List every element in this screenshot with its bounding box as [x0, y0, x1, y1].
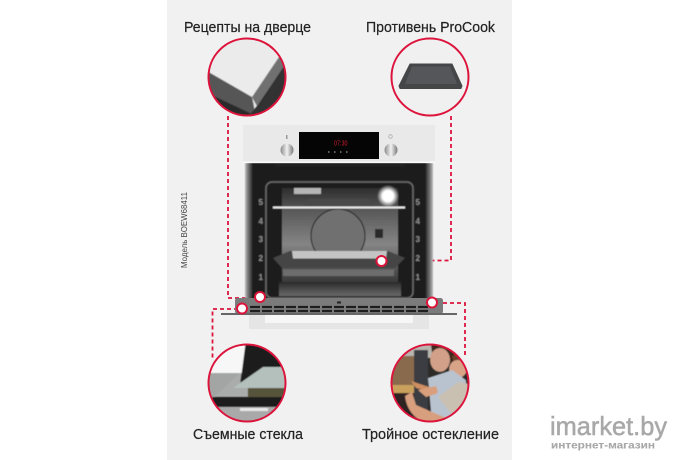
- left knob icon: [286, 135, 288, 139]
- right knob: [384, 144, 398, 156]
- marker: glazing: [427, 298, 437, 308]
- watermark: интернет-магазин: [551, 440, 655, 452]
- oven cavity: [266, 182, 413, 298]
- model label: Модель BOEW68411: [179, 192, 189, 268]
- oven floor: [279, 282, 401, 296]
- side strips: [245, 163, 252, 300]
- rail numbers: 3: [258, 235, 264, 244]
- marker: glass: [237, 304, 247, 314]
- control panel: [243, 125, 435, 166]
- rail numbers: 4: [258, 217, 264, 226]
- fan cover: [311, 209, 365, 263]
- rail numbers: [258, 198, 420, 282]
- door: [221, 298, 457, 329]
- caption: removable glass: Съемные стекла: [193, 427, 304, 443]
- dashed connector: tray: [384, 116, 451, 260]
- display: [299, 132, 379, 159]
- handle mark: [337, 302, 341, 304]
- baking tray in oven: [273, 251, 405, 268]
- rail numbers: 1: [416, 273, 420, 282]
- touch icons: [328, 151, 351, 153]
- circle: removable glass photo: [208, 344, 286, 422]
- connector plug: [375, 229, 383, 238]
- marker: tray: [376, 256, 386, 266]
- rail numbers: 5: [258, 198, 264, 207]
- left knob: [280, 144, 294, 156]
- wire rack: [273, 206, 405, 208]
- rail numbers: 4: [416, 217, 420, 226]
- rail numbers: 2: [258, 254, 264, 263]
- dashed connector: door recipes: [228, 116, 256, 298]
- clock: 07:30: [334, 138, 348, 148]
- dashed connector: removable glass: [212, 309, 238, 360]
- back wall: [282, 188, 398, 282]
- lamp: [377, 185, 399, 207]
- heading: ProCook tray: Противень ProCook: [366, 20, 496, 36]
- circle: door recipes photo: [208, 38, 286, 116]
- vents: [250, 307, 428, 311]
- rail numbers: 2: [416, 254, 420, 263]
- rail numbers: 1: [258, 273, 264, 282]
- marker: door: [255, 292, 265, 302]
- top trim: [275, 164, 405, 166]
- caption: triple glazing: Тройное остекление: [362, 427, 499, 443]
- rail numbers: 5: [416, 198, 420, 207]
- oven: [245, 163, 433, 300]
- rail numbers: 3: [416, 235, 420, 244]
- circle: baking tray: [392, 38, 468, 116]
- right knob icon: [389, 135, 392, 138]
- background panel: [167, 0, 512, 460]
- top heater: [303, 199, 375, 206]
- watermark: imarket.by: [550, 411, 667, 441]
- heading: recipes on door: Рецепты на дверце: [184, 20, 311, 36]
- oven body: [245, 163, 433, 300]
- circle: triple glazing photo: [390, 342, 470, 426]
- dashed connector: triple glazing: [436, 303, 465, 356]
- plate: [294, 188, 321, 194]
